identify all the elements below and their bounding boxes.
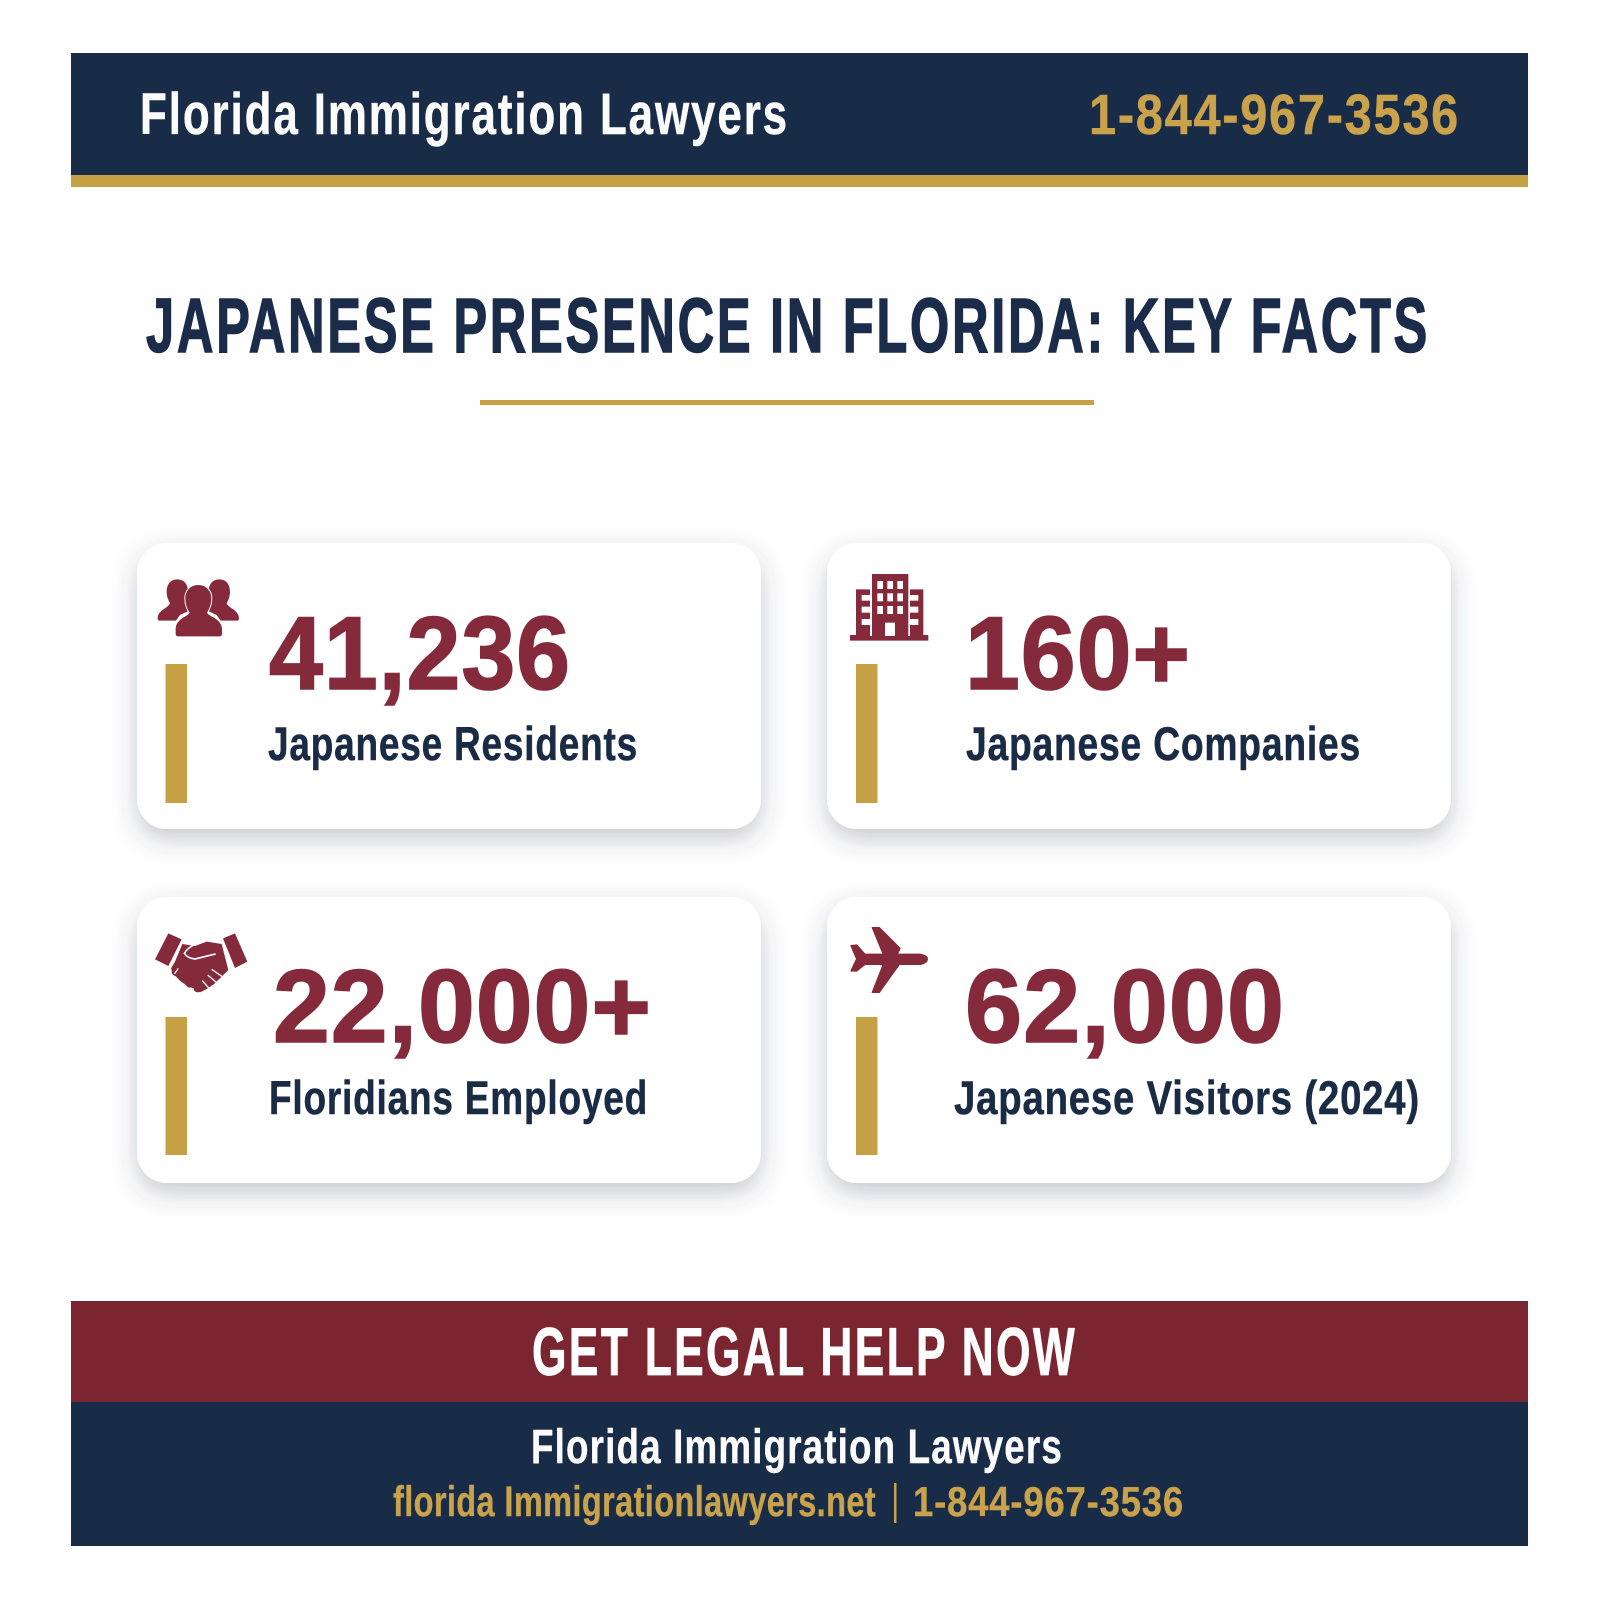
header phone number: 1-844-967-3536: [1089, 83, 1460, 147]
call to action banner: [71, 1301, 1528, 1402]
accent bar: [166, 664, 187, 803]
accent bar: [856, 1017, 878, 1155]
icon: handshake: [155, 933, 247, 992]
stat label: Japanese Companies: [966, 717, 1361, 770]
stat label: Japanese Visitors (2024): [954, 1071, 1420, 1124]
stat number: 41,236: [269, 596, 571, 712]
icon: people: [158, 579, 239, 636]
header bar: [71, 53, 1528, 187]
icon: office building: [850, 574, 928, 641]
stat label: Floridians Employed: [269, 1071, 648, 1124]
title underline: [480, 400, 1094, 405]
stat number: 160+: [965, 596, 1191, 712]
panel: Japanese visitors: [827, 897, 1451, 1183]
call to action text: GET LEGAL HELP NOW: [532, 1314, 1077, 1390]
panel: Floridians employed: [137, 897, 761, 1183]
footer firm name: Florida Immigration Lawyers: [531, 1421, 1063, 1474]
icon: airplane: [851, 928, 927, 992]
footer phone: 1-844-967-3536: [913, 1478, 1184, 1525]
panel: Japanese residents: [137, 543, 761, 829]
footer panel: [71, 1402, 1528, 1546]
accent bar: [166, 1017, 187, 1155]
panel: Japanese companies: [827, 543, 1451, 829]
stat number: 22,000+: [273, 949, 652, 1065]
header firm name: Florida Immigration Lawyers: [140, 82, 789, 147]
footer website: florida Immigrationlawyers.net: [393, 1478, 876, 1526]
stat label: Japanese Residents: [268, 717, 638, 770]
footer separator: [894, 1483, 896, 1523]
stat number: 62,000: [965, 949, 1285, 1065]
accent bar: [856, 664, 878, 803]
